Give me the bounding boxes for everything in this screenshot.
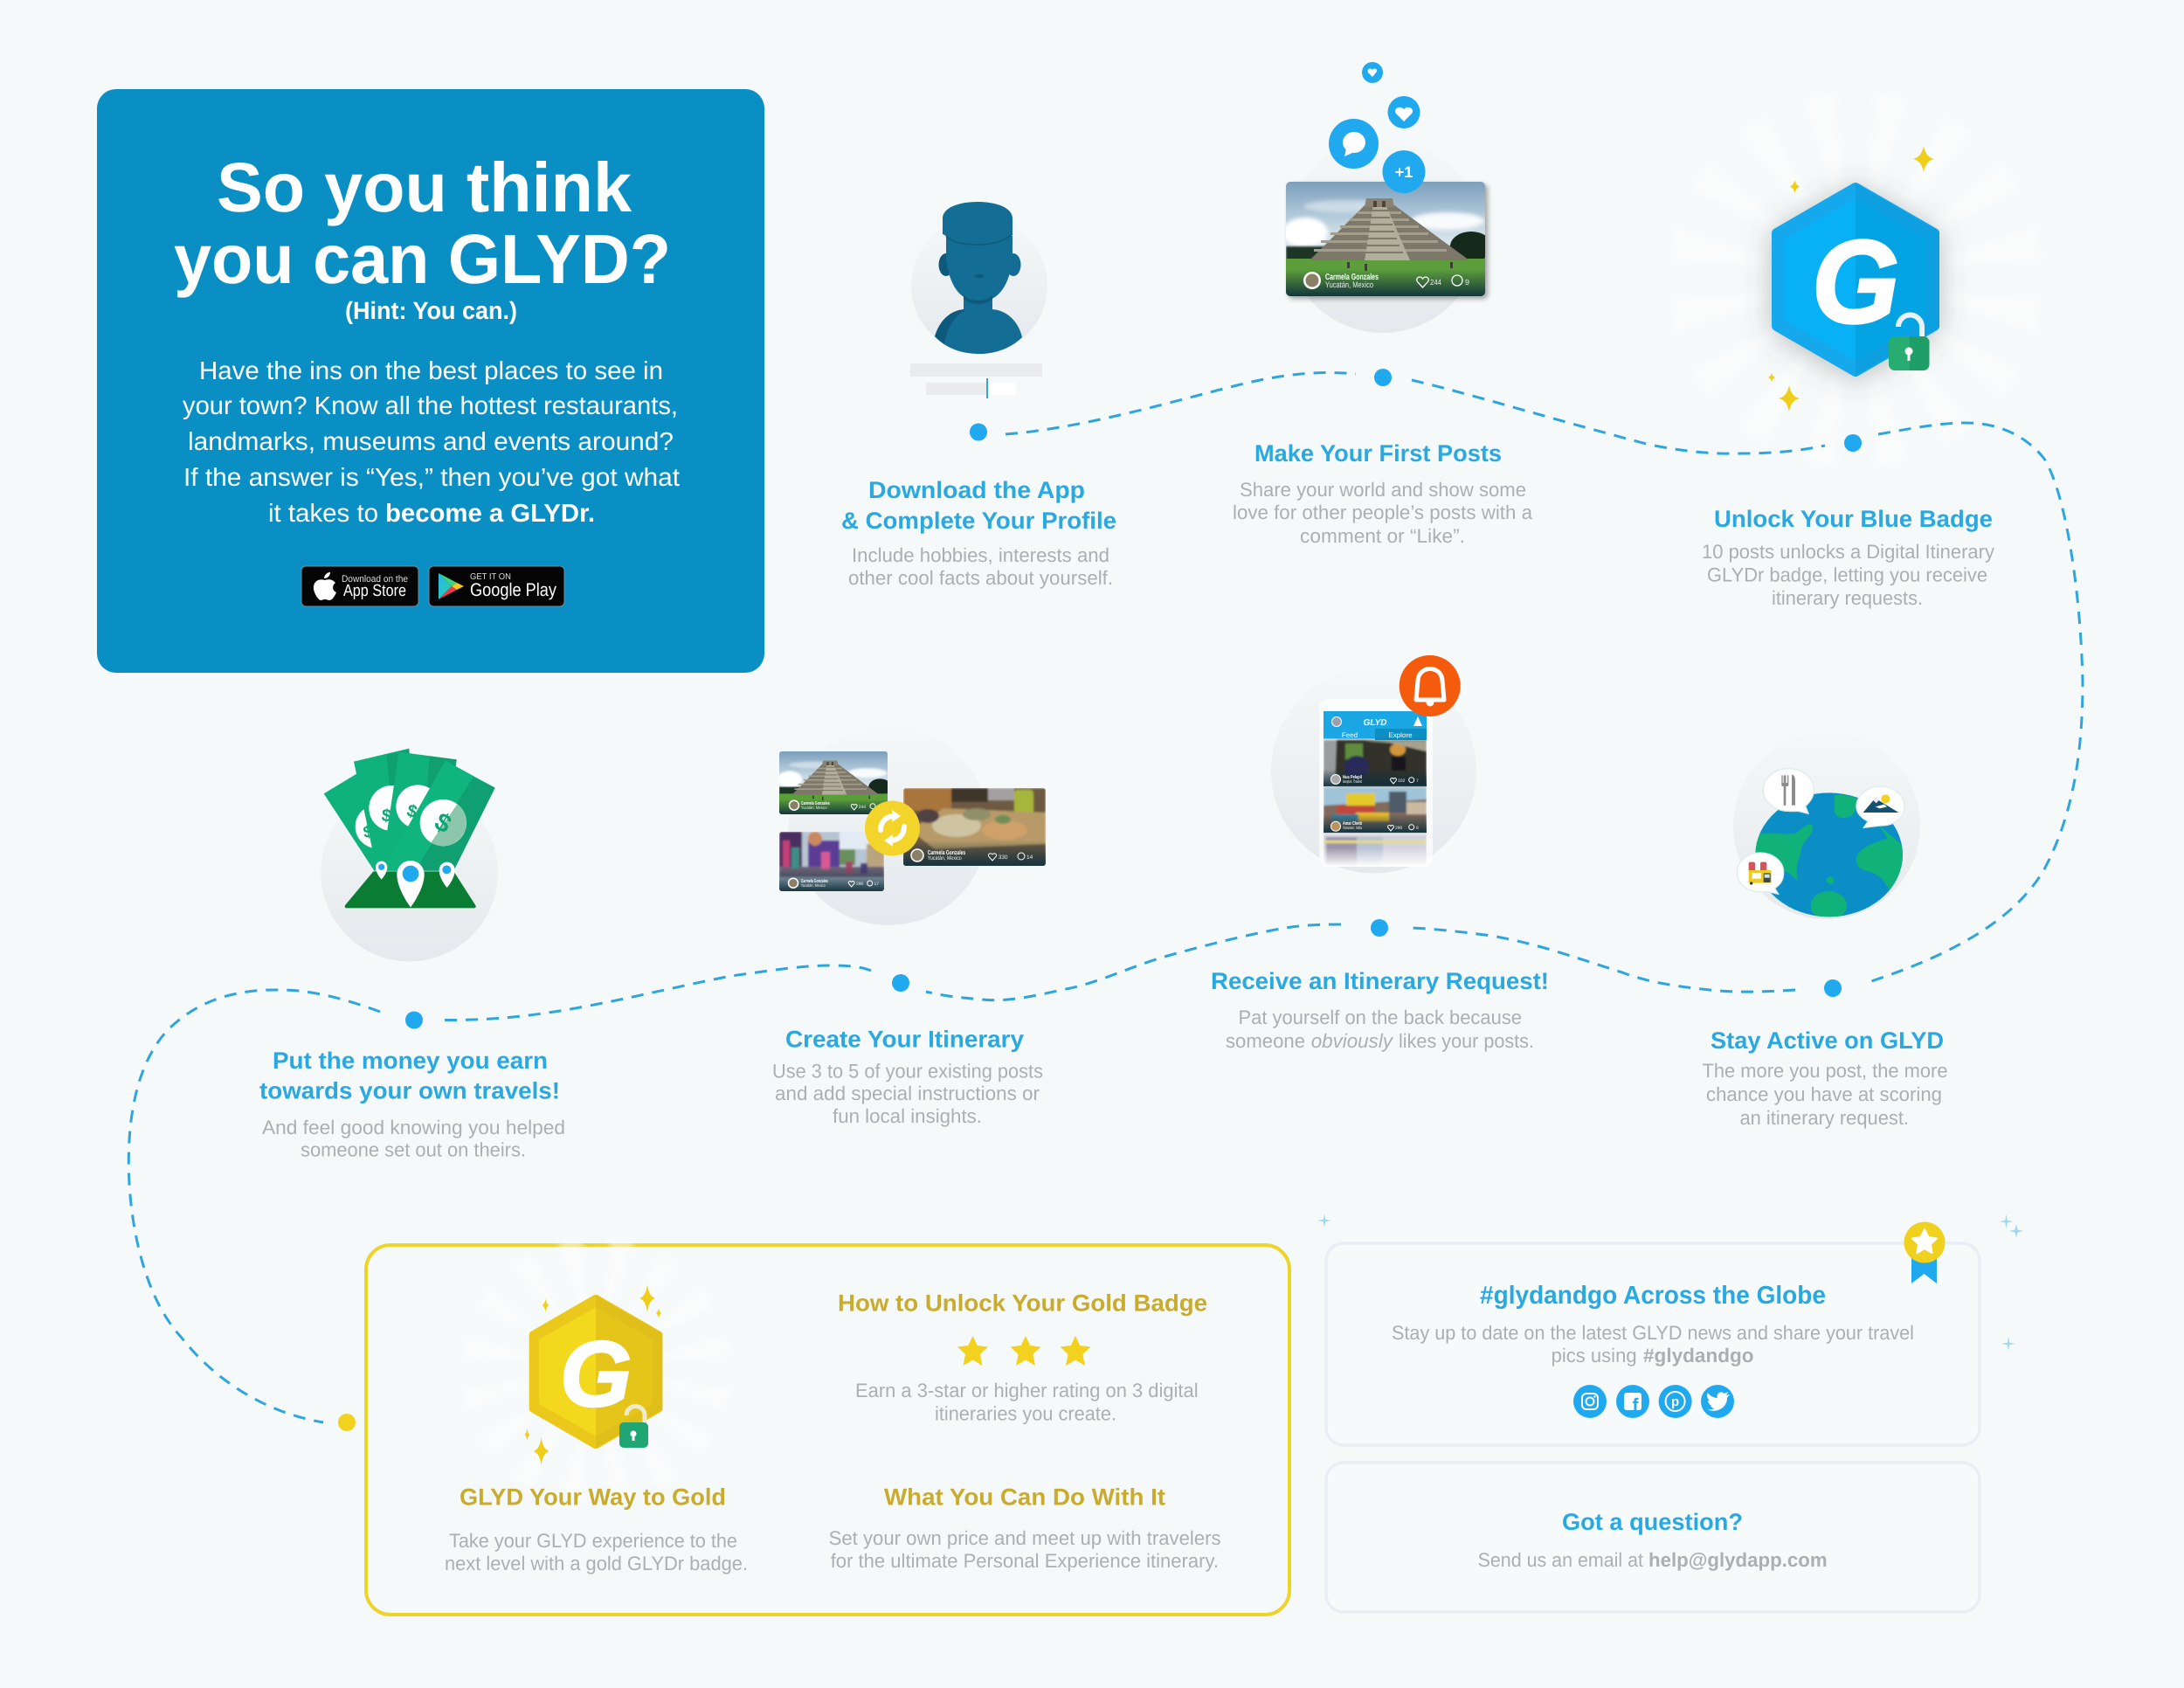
heading: & Complete Your Profile — [841, 508, 1116, 534]
illustration: banknotes and map pins: $ — [362, 822, 374, 841]
hint: (Hint: You can.) — [345, 297, 517, 324]
heading: #glydandgo Across the Globe — [1480, 1282, 1826, 1310]
description: chance you have at scoring — [1706, 1083, 1942, 1105]
icon: twitter — [1701, 1385, 1734, 1418]
heading: Stay Active on GLYD — [1711, 1027, 1944, 1054]
illustration: phone feed with notification: Feed — [1342, 731, 1358, 739]
post card: festival: Carmela Gonzales — [801, 879, 828, 884]
title: So you think — [217, 149, 632, 226]
heading: Receive an Itinerary Request! — [1211, 968, 1549, 994]
intro paragraph: it takes to — [268, 500, 378, 528]
heading — [259, 1048, 560, 1104]
route dot — [970, 423, 987, 440]
step: download the app — [841, 202, 1116, 589]
post card: pyramid: 244 — [859, 805, 866, 810]
photo post card: 244 — [1430, 278, 1441, 287]
illustration: phone feed with notification: 290 — [1395, 826, 1403, 831]
panel: intro card — [97, 89, 764, 673]
icon: blue G badge — [1668, 92, 2043, 467]
description: likes your posts. — [1399, 1030, 1534, 1052]
app store badge: Download on the — [342, 574, 408, 585]
app store badge: App Store — [343, 582, 406, 600]
description — [1702, 541, 1995, 609]
description: Use 3 to 5 of your existing posts — [772, 1061, 1043, 1083]
contact text: Send us an email at — [1478, 1549, 1644, 1571]
text: what you can do description: Set your own price and meet up with travelers — [829, 1527, 1221, 1549]
route dot — [1844, 434, 1862, 452]
heading: how to unlock: How to Unlock Your Gold Badge — [838, 1290, 1207, 1317]
heading — [841, 477, 1116, 534]
step: put money towards travels — [259, 749, 565, 1160]
description — [1233, 479, 1532, 547]
route dot — [1371, 919, 1388, 937]
illustration: banknotes and map pins: $ — [404, 800, 419, 821]
route dot — [405, 1012, 423, 1029]
post card: pyramid: Carmela Gonzales — [801, 801, 830, 806]
panel: glydandgo social — [1326, 1221, 1980, 1445]
heading: Download the App — [868, 477, 1085, 503]
profile form bars — [910, 363, 1042, 398]
text: what you can do description — [829, 1527, 1221, 1572]
icons: social reaction bubbles: +1 — [1395, 163, 1413, 181]
description — [1226, 1007, 1534, 1052]
photo post card: Yucatán, Mexico — [1325, 280, 1373, 290]
intro paragraph: become a GLYDr. — [385, 500, 595, 528]
description — [772, 1061, 1043, 1127]
post card: tacos — [903, 788, 1046, 866]
text: what you can do description: for the ultimate Personal Experience itinerary. — [831, 1550, 1219, 1572]
description: Include hobbies, interests and — [852, 544, 1109, 566]
dashed route — [128, 372, 2083, 1422]
contact text — [1478, 1549, 1828, 1571]
google play badge: Google Play — [470, 580, 556, 600]
description: And feel good knowing you helped — [262, 1117, 565, 1138]
illustration: phone feed with notification: Explore — [1388, 731, 1413, 739]
illustration: phone feed with notification: Bangkok, Thailand — [1343, 779, 1362, 785]
google play badge: GET IT ON — [470, 572, 511, 582]
icon: facebook — [1616, 1385, 1649, 1418]
intro paragraph: landmarks, museums and events around? — [188, 428, 674, 456]
description: an itinerary request. — [1740, 1107, 1909, 1129]
route dot — [892, 974, 909, 992]
illustration: phone feed with notification: 7 — [1416, 778, 1419, 784]
illustration: phone feed with notification: 8 — [1416, 826, 1419, 831]
intro paragraph: Have the ins on the best places to see in — [199, 357, 663, 385]
description — [1702, 1060, 1948, 1129]
panel: got a question — [1326, 1463, 1980, 1612]
icon: medal — [1904, 1221, 1945, 1283]
description: GLYDr badge, letting you receive — [1707, 564, 1987, 585]
post card: tacos: Carmela Gonzales — [928, 849, 965, 856]
description — [262, 1117, 565, 1160]
intro paragraph: your town? Know all the hottest restaurants, — [183, 392, 678, 420]
illustration: banknotes and map pins: $ — [430, 806, 456, 839]
illustration backdrop — [1286, 139, 1480, 333]
step: first posts — [1233, 62, 1532, 547]
icon: three stars — [957, 1336, 1090, 1366]
panel: gold badge — [366, 1236, 1289, 1615]
title: you can GLYD? — [174, 220, 671, 298]
description: love for other people’s posts with a — [1233, 502, 1532, 523]
route dot — [1374, 369, 1392, 386]
icon: profile avatar — [911, 202, 1047, 354]
text: rating requirement: itineraries you create. — [935, 1403, 1116, 1425]
illustration: phone feed with notification: 102 — [1398, 778, 1406, 784]
description: Stay up to date on the latest GLYD news and share your travel — [1392, 1322, 1914, 1344]
heading: glyd your way to gold: GLYD Your Way to Gold — [460, 1484, 726, 1511]
illustration: banknotes and map pins — [321, 749, 498, 961]
photo post card: Carmela Gonzales — [1325, 273, 1379, 282]
icon: yellow swap — [865, 800, 920, 856]
route end dot: gold — [338, 1414, 356, 1431]
step: create itinerary — [772, 726, 1046, 1127]
description — [1392, 1322, 1914, 1366]
route dot — [1824, 979, 1842, 997]
post card: tacos: 14 — [1026, 854, 1033, 861]
illustration: phone feed with notification: Varanasi, India — [1343, 826, 1362, 831]
step: itinerary request — [1211, 655, 1549, 1052]
photo post card — [1282, 182, 1492, 296]
post card: festival: 290 — [856, 882, 864, 887]
description: Pat yourself on the back because — [1239, 1007, 1522, 1028]
description: The more you post, the more — [1702, 1060, 1948, 1082]
description: 10 posts unlocks a Digital Itinerary — [1702, 541, 1995, 563]
heading: Got a question? — [1562, 1509, 1743, 1535]
heading: towards your own travels! — [259, 1078, 560, 1104]
icon: pinterest: p — [1671, 1394, 1679, 1409]
description: and add special instructions or — [775, 1083, 1040, 1104]
text: gold badge description: Take your GLYD experience to the — [449, 1530, 737, 1552]
icons: social reaction bubbles — [1329, 62, 1426, 193]
icon: facebook: f — [1632, 1395, 1639, 1415]
icon: globe with location bubbles — [1733, 768, 1920, 919]
heading: Create Your Itinerary — [785, 1027, 1024, 1053]
illustration: phone feed with notification: Nua Pelapil — [1343, 775, 1362, 780]
text: gold badge description — [445, 1530, 748, 1574]
icon: instagram — [1573, 1385, 1607, 1418]
post card: festival — [779, 832, 884, 891]
illustration: phone feed with notification: Amar Chetti — [1343, 821, 1362, 827]
illustration backdrop — [789, 726, 988, 925]
post card: pyramid — [778, 751, 891, 814]
post card: pyramid: Yucatán, Mexico — [801, 806, 827, 811]
icon: gold G badge: G — [560, 1323, 632, 1426]
decorative small sparkles — [1317, 1214, 2023, 1351]
intro paragraph — [183, 357, 680, 528]
heading: Unlock Your Blue Badge — [1714, 506, 1993, 532]
step: stay active — [1702, 732, 1948, 1129]
heading: Make Your First Posts — [1254, 440, 1502, 467]
illustration: banknotes and map pins: $ — [381, 806, 392, 826]
description: Share your world and show some — [1240, 479, 1526, 501]
heading: Put the money you earn — [273, 1048, 548, 1074]
post card: tacos: 330 — [999, 854, 1008, 861]
description: pics using — [1552, 1345, 1637, 1366]
description: someone — [1226, 1030, 1305, 1052]
contact text: help@glydapp.com — [1648, 1549, 1828, 1571]
post card: festival: 17 — [874, 882, 879, 887]
text: gold badge description: next level with a gold GLYDr badge. — [445, 1553, 748, 1574]
post card: tacos: Yucatán, Mexico — [928, 855, 962, 861]
post card: festival: Yucatán, Mexico — [801, 883, 826, 889]
photo post card: 9 — [1465, 278, 1469, 287]
text: rating requirement — [855, 1380, 1199, 1425]
description: obviously — [1311, 1030, 1394, 1052]
heading: what you can do: What You Can Do With It — [884, 1484, 1165, 1511]
description: comment or “Like”. — [1300, 525, 1465, 547]
icon: pinterest — [1659, 1385, 1692, 1418]
illustration: phone feed with notification — [1271, 655, 1476, 874]
description: fun local insights. — [833, 1105, 982, 1127]
icon: blue G badge: G — [1812, 216, 1899, 348]
text: rating requirement: Earn a 3-star or higher rating on 3 digital — [855, 1380, 1199, 1401]
app store badge — [301, 566, 418, 606]
description: someone set out on theirs. — [301, 1139, 526, 1160]
intro paragraph: If the answer is “Yes,” then you’ve got what — [183, 464, 680, 492]
description: other cool facts about yourself. — [848, 567, 1113, 589]
description — [848, 544, 1113, 589]
google play badge — [429, 566, 564, 606]
icon: gold G badge — [460, 1236, 731, 1507]
description: #glydandgo — [1643, 1345, 1754, 1366]
title — [174, 149, 671, 298]
step: blue badge — [1668, 92, 2043, 609]
illustration: phone feed with notification: GLYD — [1363, 718, 1387, 728]
description: itinerary requests. — [1772, 587, 1923, 609]
